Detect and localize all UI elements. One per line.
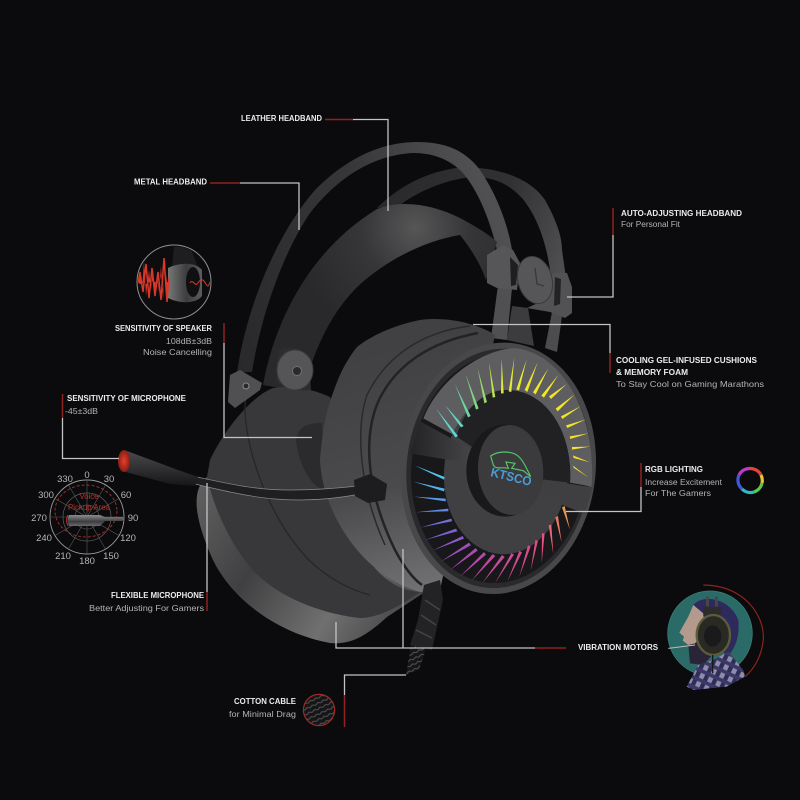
portrait headset (668, 597, 730, 673)
callout: cotton cable (229, 675, 406, 727)
angle labels: 150 (103, 551, 119, 562)
pickup label: Pickup Area (68, 502, 110, 512)
angle labels (31, 470, 138, 567)
icon: speaker sensitivity circle (137, 245, 211, 319)
portrait: gamer with headset (668, 585, 763, 690)
callout: metal headband: METAL HEADBAND (134, 176, 207, 186)
icon: RGB colour ring (738, 468, 762, 493)
spokes bar right (537, 479, 592, 514)
shirt (687, 652, 745, 690)
angle labels: 60 (121, 490, 131, 501)
rear headband strap (377, 167, 566, 278)
logo text: KTSCO (489, 465, 533, 489)
angle labels: 120 (120, 533, 136, 544)
ear cushion lower band (197, 470, 430, 643)
callout: cooling gel cushions: COOLING GEL-INFUSED CUSHIONS (616, 355, 757, 365)
callout: sensitivity of speaker: Noise Cancelling (143, 347, 212, 357)
polar pickup chart (31, 470, 138, 567)
angle labels: 300 (38, 490, 54, 501)
callout: cooling gel cushions: To Stay Cool on Gaming Marathons (616, 379, 764, 389)
straps below slider (491, 285, 562, 352)
metal headband (237, 142, 512, 372)
headset illustration (118, 142, 608, 675)
callout: vibration motors (336, 549, 658, 652)
microphone boom (118, 450, 387, 503)
slider adjuster (487, 245, 572, 318)
ear cup housing (320, 319, 495, 592)
callout: sensitivity of speaker (115, 323, 312, 438)
callout: auto-adjusting headband: For Personal Fit (621, 219, 681, 229)
callout: auto-adjusting headband (567, 208, 742, 297)
pickup label (68, 491, 110, 512)
callout: metal headband (134, 176, 299, 230)
callout: sensitivity of microphone: -45±3dB (65, 406, 98, 416)
callout: vibration motors: VIBRATION MOTORS (578, 642, 658, 652)
callout: sensitivity of microphone (62, 393, 186, 458)
angle labels: 270 (31, 513, 47, 524)
callout: RGB lighting: RGB LIGHTING (645, 464, 703, 474)
callout: RGB lighting: For The Gamers (645, 488, 711, 498)
callout: leather headband (241, 113, 388, 211)
angle labels: 240 (36, 533, 52, 544)
callout: flexible microphone: Better Adjusting For Gamers (89, 603, 204, 613)
callout: sensitivity of microphone: SENSITIVITY OF MICROPHONE (67, 393, 186, 403)
angle labels: 210 (55, 551, 71, 562)
rgb spokes (413, 358, 590, 583)
cable (406, 580, 443, 675)
angle labels: 330 (57, 474, 73, 485)
callout: cotton cable: for Minimal Drag (229, 709, 296, 719)
leather headband (263, 204, 497, 392)
icon: braided cable circle (303, 694, 335, 726)
angle labels: 30 (104, 474, 114, 485)
pickup label: Voice (80, 491, 99, 501)
callout: RGB lighting: Increase Excitement (645, 477, 723, 487)
mic in chart (66, 515, 124, 526)
angle labels: 0 (84, 470, 90, 481)
left hinge (228, 348, 313, 408)
angle labels: 180 (79, 556, 95, 567)
callout: cotton cable: COTTON CABLE (234, 696, 296, 706)
callout: sensitivity of speaker: 108dB±3dB (166, 336, 212, 346)
callout: flexible microphone (89, 483, 207, 613)
microphone red tip (118, 450, 130, 472)
callout: RGB lighting (566, 463, 723, 512)
ear cushion leather pad (207, 387, 420, 618)
ear cup face with RGB spokes (388, 333, 608, 604)
callout: sensitivity of speaker: SENSITIVITY OF SPEAKER (115, 323, 213, 333)
hub (466, 425, 544, 517)
red arc (703, 585, 763, 677)
logo lion (491, 452, 531, 477)
callout: cooling gel cushions (473, 324, 764, 389)
pickup area (55, 485, 117, 537)
angle labels: 90 (128, 513, 138, 524)
spokes bar left (410, 422, 480, 465)
callout: cooling gel cushions: & MEMORY FOAM (616, 367, 688, 377)
callout: auto-adjusting headband: AUTO-ADJUSTING HEADBAND (621, 208, 742, 218)
callout: flexible microphone: FLEXIBLE MICROPHONE (111, 590, 204, 600)
callout: leather headband: LEATHER HEADBAND (241, 113, 322, 123)
